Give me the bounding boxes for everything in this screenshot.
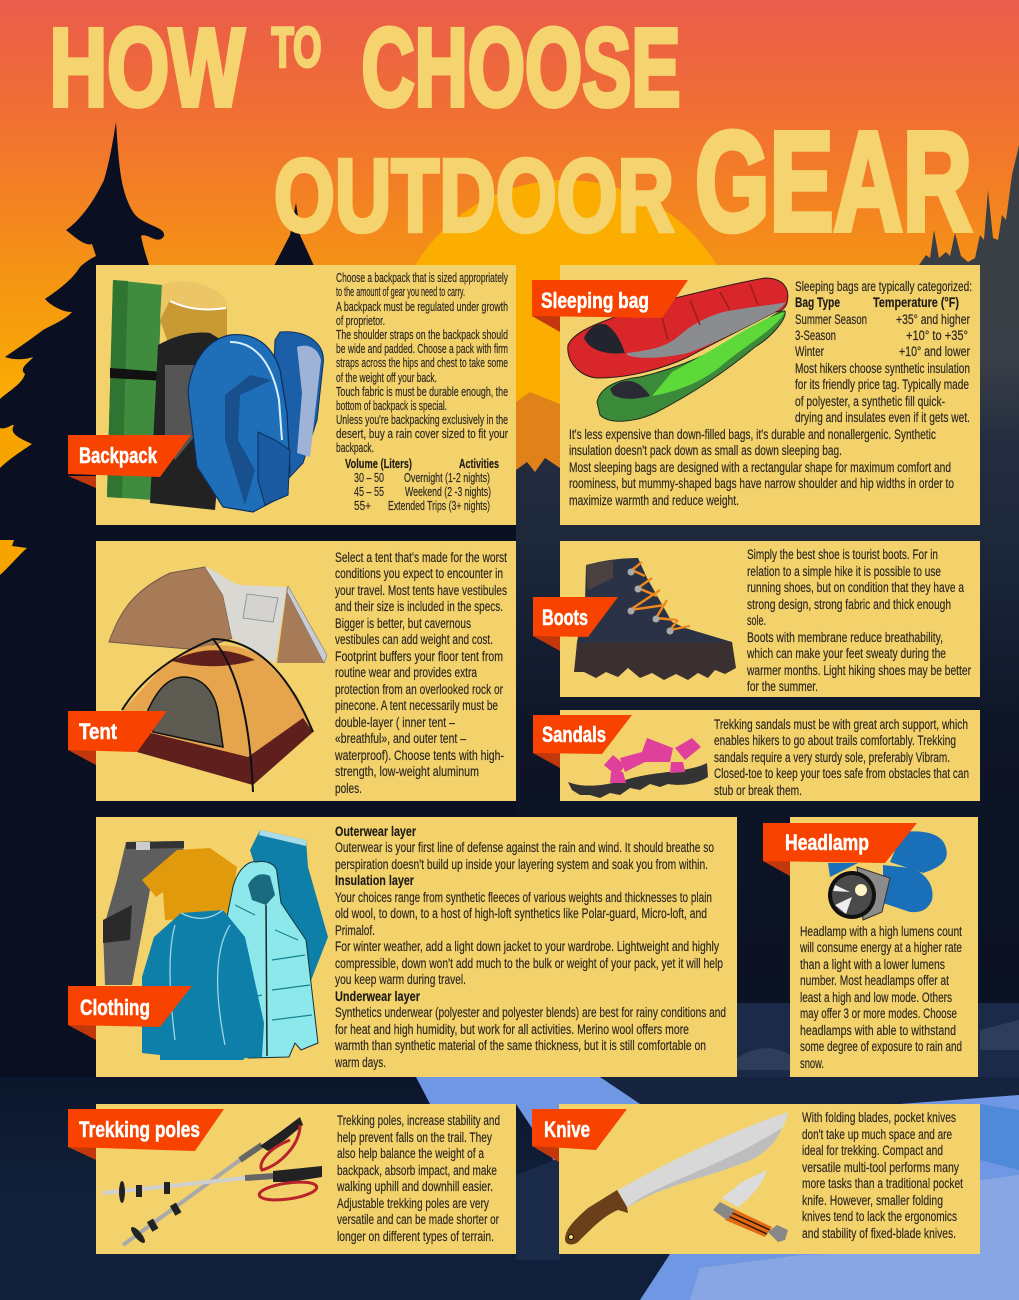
icon: sleeping bags	[568, 278, 788, 421]
backpack volume table: Activities	[459, 457, 499, 471]
tent text: conditions you expect to encounter in	[335, 566, 503, 581]
dark ground band	[0, 1077, 1019, 1300]
panel: knive	[532, 1104, 980, 1254]
backpack volume table: 30 – 50	[354, 471, 384, 485]
icon: tent	[109, 567, 327, 792]
backpack volume table	[345, 457, 499, 513]
headlamp text: some degree of exposure to rain and	[800, 1039, 962, 1054]
distant orange hills	[516, 392, 560, 480]
backpack text: be wide and padded. Choose a pack with firm	[336, 342, 508, 356]
label: Boots	[533, 597, 618, 651]
label: Knive	[532, 1109, 627, 1162]
tent text: double-layer ( inner tent –	[335, 715, 455, 730]
knive text: ideal for trekking. Compact and	[802, 1143, 943, 1158]
title	[50, 6, 972, 260]
panel: clothing	[68, 817, 737, 1077]
backpack volume table: 45 – 55	[354, 485, 384, 499]
tent text: your travel. Most tents have vestibules	[335, 583, 507, 598]
tent text: protection from an overlooked rock or	[335, 682, 503, 697]
knive text: don't take up much space and are	[802, 1127, 952, 1142]
icon: knives	[565, 1112, 788, 1244]
trekking poles text: walking uphill and downhill easier.	[336, 1179, 493, 1194]
knive text: and stability of fixed-blade knives.	[802, 1226, 956, 1241]
title word: TO: TO	[272, 16, 322, 80]
headlamp text: headlamps with able to withstand	[800, 1023, 956, 1038]
label: Backpack: Backpack	[79, 443, 158, 468]
lower sky pocket	[0, 540, 27, 575]
rock at water edge	[516, 1158, 560, 1260]
trekking poles text: also help balance the weight of a	[337, 1146, 484, 1161]
trekking poles text	[336, 1113, 500, 1244]
sleeping bag text: insulation doesn't pack down as small as down sleeping bag.	[569, 443, 842, 458]
clothing text: Primalof.	[335, 923, 375, 938]
trekking poles text: Adjustable trekking poles are very	[337, 1196, 489, 1211]
clothing text: warm days.	[334, 1055, 386, 1070]
tent text: Bigger is better, but cavernous	[335, 616, 471, 631]
knive panel background	[559, 1104, 980, 1254]
sandals panel background	[560, 710, 980, 801]
label: Sandals: Sandals	[542, 722, 606, 747]
boots text: Boots with membrane reduce breathability,	[747, 630, 943, 645]
sleeping bag text: Bag Type	[795, 295, 840, 310]
boots panel background	[560, 541, 980, 697]
icon: headlamp	[828, 831, 947, 920]
tent text: «breathful», and outer tent –	[335, 731, 466, 746]
panel: tent	[68, 541, 516, 801]
sleeping bag text: Temperature (°F)	[873, 295, 959, 310]
panel: headlamp	[763, 817, 978, 1077]
sandals text: stub or break them.	[714, 783, 802, 798]
backpack text: Unless you're backpacking exclusively in the	[336, 413, 508, 427]
sleeping bag panel background	[560, 265, 980, 525]
tent text: pinecone. A tent necessarily must be	[335, 698, 498, 713]
panel: backpack	[68, 265, 516, 525]
backpack panel background	[96, 265, 516, 525]
backpack text: to the amount of gear you need to carry.	[336, 285, 465, 299]
icon: clothing layers	[103, 830, 328, 1060]
label: Sandals	[533, 715, 632, 768]
trekking poles text: help prevent falls on the trail. They	[337, 1130, 492, 1145]
clothing text: for heat and high humidity, but work for all activities. Merino wool offers more	[335, 1022, 689, 1037]
sleeping bag text	[569, 279, 972, 508]
clothing text: compressible, down won't add much to the bulk or weight of your pack, yet it will help	[335, 956, 723, 971]
clothing text: Underwear layer	[335, 989, 421, 1004]
backpack text: A backpack must be regulated under growth	[336, 300, 508, 314]
title word: HOW: HOW	[50, 6, 245, 130]
panel: sleeping bag	[532, 265, 980, 525]
icon: trekking poles	[103, 1117, 322, 1245]
boots text: which can make your feet sweaty during the	[746, 646, 946, 661]
label: Boots: Boots	[542, 605, 588, 630]
headlamp text: than a light with a lower lumens	[800, 957, 945, 972]
backpack text: straps across the hips and chest to take some	[336, 356, 508, 370]
sleeping bag text: +35° and higher	[896, 312, 970, 327]
dark far bank	[600, 1077, 1019, 1104]
clothing text: Insulation layer	[335, 873, 415, 888]
left tree mass	[0, 122, 516, 1080]
boots text: sole.	[747, 613, 766, 628]
title word: CHOOSE: CHOOSE	[362, 6, 680, 130]
clothing text: you keep warm during travel.	[335, 972, 466, 987]
label: Sleeping bag: Sleeping bag	[541, 288, 649, 313]
tent text	[334, 550, 507, 796]
knive text: With folding blades, pocket knives	[802, 1110, 956, 1125]
label: Sleeping bag	[532, 280, 688, 332]
clothing text: Outerwear layer	[335, 824, 417, 839]
label: Clothing: Clothing	[80, 995, 150, 1020]
small pine tree	[273, 203, 315, 268]
label: Knive: Knive	[544, 1117, 590, 1142]
panel: trekking poles	[68, 1104, 516, 1254]
tent text: routine wear and provides extra	[335, 665, 477, 680]
tent panel background	[96, 541, 516, 801]
label: Backpack	[68, 435, 191, 488]
sleeping bag text: +10° to +35°	[906, 328, 968, 343]
backpack volume table: Weekend (2 -3 nights)	[405, 485, 491, 499]
icon: sandal	[568, 738, 708, 798]
trekking poles text: versatile and can be made shorter or	[337, 1212, 499, 1227]
tent text: Footprint buffers your floor tent from	[335, 649, 503, 664]
clothing text: Your choices range from synthetic fleeces of various weights and thicknesses to plain	[335, 890, 712, 905]
water lighter patches	[690, 1175, 1019, 1300]
blue reflection	[980, 1104, 1019, 1170]
tent text: strength, low-weight aluminum	[335, 764, 479, 779]
sleeping bag text: +10° and lower	[899, 344, 970, 359]
backpack text: The shoulder straps on the backpack should	[336, 328, 508, 342]
tent text: poles.	[335, 781, 362, 796]
headlamp text: number. Most headlamps offer at	[800, 973, 949, 988]
sky gradient	[0, 0, 1019, 420]
lake shore	[737, 1003, 1019, 1083]
sleeping bag text: of polyester, a synthetic fill quick-	[795, 394, 945, 409]
icon: boot	[574, 558, 736, 680]
label: Tent	[68, 711, 167, 765]
headlamp text: Headlamp with a high lumens count	[800, 924, 962, 939]
sleeping bag text: maximize warmth and reduce weight.	[569, 493, 739, 508]
headlamp text: least a high and low mode. Others	[800, 990, 952, 1005]
trekking poles text: Trekking poles, increase stability and	[337, 1113, 500, 1128]
backpack volume table: Volume (Liters)	[345, 457, 412, 471]
panel: boots	[533, 541, 980, 697]
knive text: versatile multi-tool performs many	[802, 1160, 959, 1175]
headlamp panel background	[790, 817, 978, 1077]
boots text	[746, 547, 971, 694]
headlamp text: will consume energy at a higher rate	[799, 940, 962, 955]
backpack volume table: 55+	[354, 499, 371, 513]
label: Tent: Tent	[79, 719, 118, 744]
trekking poles panel background	[96, 1104, 516, 1254]
sky pockets between branches	[0, 425, 32, 468]
title word: OUTDOOR: OUTDOOR	[274, 138, 674, 253]
backpack text: Touch fabric is must be durable enough, the	[336, 385, 508, 399]
backpack text: backpack.	[336, 441, 374, 455]
headlamp text: may offer 3 or more modes. Choose	[800, 1006, 957, 1021]
boots text: strong design, strong fabric and thick enough	[747, 597, 951, 612]
backpack volume table: Overnight (1-2 nights)	[404, 471, 490, 485]
backpack text: of proprietor.	[336, 314, 385, 328]
knive text: more tasks than a traditional pocket	[802, 1176, 963, 1191]
trekking poles text: longer on different types of terrain.	[337, 1229, 494, 1244]
water	[416, 1077, 1019, 1300]
backpack volume table: Extended Trips (3+ nights)	[388, 499, 490, 513]
boots text: relation to a simple hike it is possible to use	[747, 564, 941, 579]
clothing panel background	[96, 817, 737, 1077]
label: Trekking poles	[68, 1109, 224, 1160]
sleeping bag text: Winter	[795, 344, 824, 359]
backpack text: desert, buy a rain cover sized to fit your	[336, 427, 508, 441]
clothing text	[334, 824, 726, 1070]
tent text: vestibules can add weight and cost.	[335, 632, 493, 647]
tent text: and their size is included in the specs.	[335, 599, 503, 614]
backpack text: Choose a backpack that is sized appropriately	[336, 271, 508, 285]
trekking poles text: backpack, absorb impact, and make	[337, 1163, 497, 1178]
boots text: Simply the best shoe is tourist boots. For in	[747, 547, 938, 562]
headlamp text: snow.	[800, 1056, 824, 1071]
label: Headlamp: Headlamp	[785, 830, 869, 855]
clothing text: For winter weather, add a light down jacket to your wardrobe. Lightweight and highly	[335, 939, 719, 954]
panel: sandals	[533, 710, 980, 801]
knive text: knife. However, smaller folding	[802, 1193, 943, 1208]
label: Clothing	[68, 986, 192, 1040]
tent text: Select a tent that's made for the worst	[335, 550, 507, 565]
tent text: waterproof). Choose tents with high-	[334, 748, 504, 763]
backpack text: bottom of backpack is special.	[336, 399, 447, 413]
clothing text: Outerwear is your first line of defense against the rain and wind. It should breathe so	[335, 840, 714, 855]
shore highlight	[737, 1020, 1019, 1070]
label: Trekking poles: Trekking poles	[79, 1117, 200, 1142]
right forest and mid slopes	[516, 145, 1019, 1010]
sleeping bag text: Summer Season	[795, 312, 867, 327]
clothing text: old wool, to down, to a host of high-loft synthetics like Polar-guard, Micro-loft, and	[335, 906, 707, 921]
headlamp text	[799, 924, 962, 1071]
clothing text: warmth than synthetic material of the same thickness, but it is still comfortable on	[334, 1038, 706, 1053]
sandals text	[714, 717, 969, 798]
clothing text: Synthetics underwear (polyester and polyester blends) are best for rainy conditions and	[335, 1005, 726, 1020]
label: Headlamp	[763, 823, 917, 876]
sleeping bag text: 3-Season	[795, 328, 836, 343]
knive text	[802, 1110, 963, 1241]
knive text: knives tend to lack the ergonomics	[802, 1209, 957, 1224]
backpack text: of the weight off your back.	[336, 371, 437, 385]
backpack text	[336, 271, 508, 455]
boots text: for the summer.	[747, 679, 818, 694]
icon: backpack with sleeping mat	[107, 280, 323, 512]
sun	[390, 180, 742, 532]
clothing text: perspiration doesn't build up inside your layering system and soak you from within.	[335, 857, 708, 872]
